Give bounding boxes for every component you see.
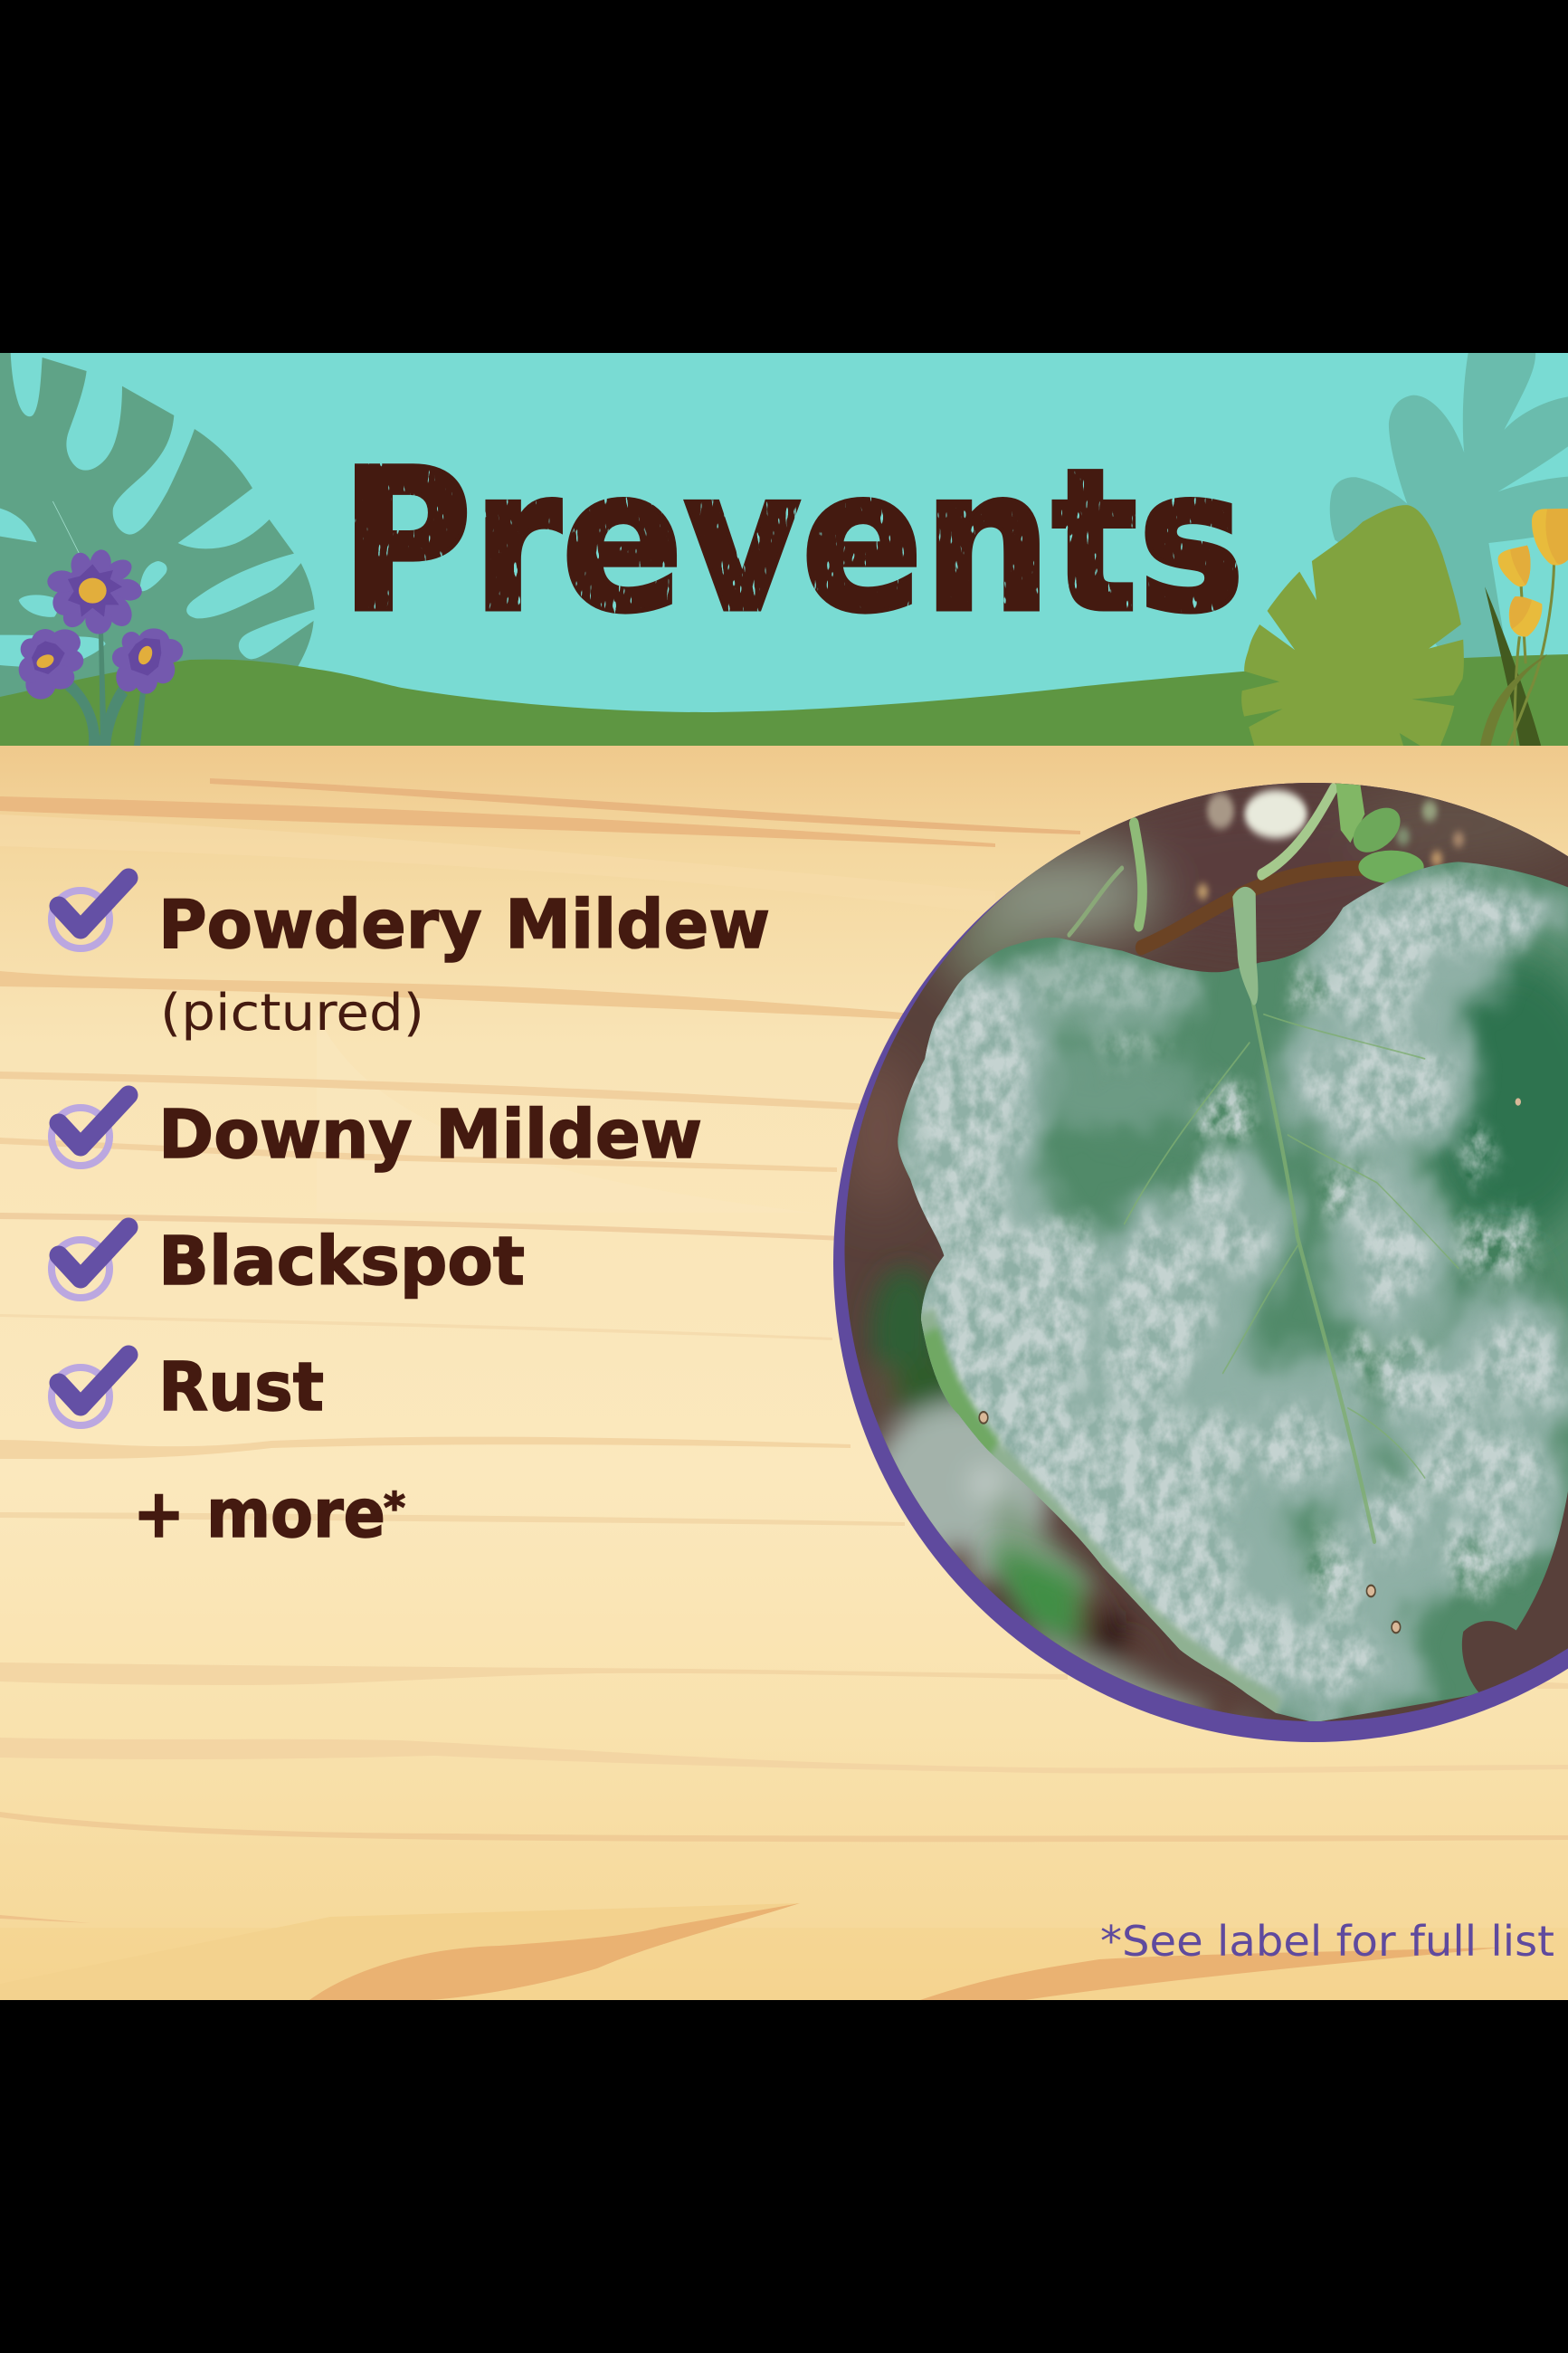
pale folded leaf margin [921,1313,1276,1716]
mildew haze [887,874,1568,1726]
right background teal leaves [1330,350,1568,676]
item: + more: * [384,1483,405,1532]
branch and stems [1069,789,1363,948]
photo: powdery mildew leaf [814,760,1568,1756]
label text: Downy Mildew [158,1096,702,1174]
photo ring [833,783,1568,1742]
sky background [0,353,1568,746]
flower buds [1335,783,1424,883]
item: Powdery Mildew [52,878,770,964]
right tulips and grass [1479,509,1568,748]
hill [0,654,1568,746]
leaf spots [979,1098,1521,1633]
right olive green leaf [1241,505,1464,748]
icon: check circle [52,878,128,948]
title: Prevents [340,428,1245,656]
footnote: *See label for full list [1100,1917,1554,1966]
left monstera leaf [0,353,315,709]
item: Blackspot [52,1223,525,1300]
infographic canvas [0,353,1568,2000]
powdery mildew blotches [901,878,1568,1703]
soft wood bands [0,814,995,914]
bokeh highlights [1197,790,1464,900]
label text: Rust [158,1348,324,1426]
item: + more: + more [133,1475,385,1553]
wood grain lines [0,778,1568,1923]
wood panel [0,746,1568,2000]
purple flower left [19,629,83,700]
label text: Powdery Mildew [158,886,770,964]
icon: check circle [52,1355,128,1425]
leaf stalk [1232,887,1258,1005]
icon: check circle [52,1227,128,1298]
photo background foliage [814,760,1568,1756]
bottom wood shapes [0,1903,800,2000]
wood base gradient [0,746,1568,2000]
leaf veins [1125,970,1459,1541]
item: Downy Mildew [52,1095,702,1174]
purple flower right [112,628,183,694]
item: Rust [52,1348,324,1426]
purple flower large [47,548,144,634]
disease checklist [52,878,770,1553]
leaf body [887,843,1568,1732]
header banner [0,350,1568,748]
label text: Blackspot [158,1223,525,1300]
icon: check circle [52,1095,128,1166]
stems of purple flowers [65,631,146,746]
note: pictured: (pictured) [160,984,424,1043]
